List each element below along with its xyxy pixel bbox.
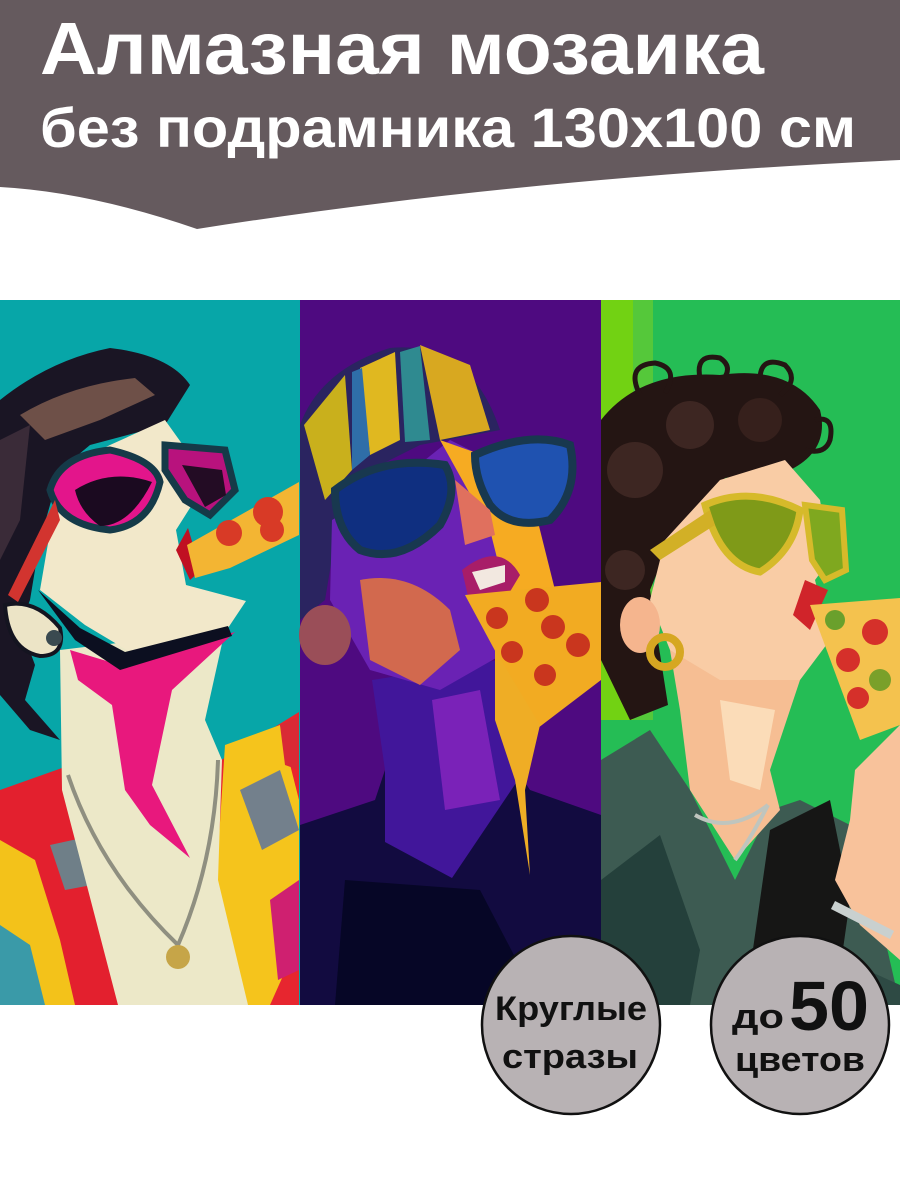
jacket [601,730,900,1005]
badge: round rhinestones: Круглые [495,990,647,1028]
badge: up to 50 colours: до [732,998,784,1036]
sunglasses [705,496,800,572]
ear [299,605,351,665]
panel: green portrait [601,300,900,1005]
necklace [68,760,218,945]
sunglasses [50,450,160,530]
pizza slice [465,582,601,728]
lips [176,528,206,580]
badge: up to 50 colours [711,936,889,1114]
shirt [0,768,120,1005]
necklace [695,805,768,860]
neck shadow [70,632,235,858]
badge: up to 50 colours: 50 [789,967,869,1045]
face [330,440,545,690]
torso [300,740,601,1005]
badge: round rhinestones: стразы [502,1038,638,1076]
bracelet [833,905,892,935]
curly hair [601,373,822,720]
neck [372,660,518,878]
face [650,460,830,680]
ear [5,604,61,656]
nose [455,480,495,545]
title: Алмазная мозаика [40,7,765,90]
sunglasses [335,463,451,554]
pizza slice [187,482,299,578]
neck [670,650,800,860]
lips [793,580,828,630]
panel: teal portrait [0,300,300,1005]
panel: purple portrait [299,300,601,1005]
chest and neck [60,630,248,1005]
pizza slice [810,598,900,740]
hand [835,725,900,960]
ear and earring [620,597,660,653]
header banner [0,0,900,229]
badge: round rhinestones [482,936,660,1114]
face [40,420,246,652]
subtitle: без подрамника 130х100 см [40,96,856,159]
badge: up to 50 colours: цветов [735,1041,865,1079]
hair [300,347,500,620]
mouth [462,556,520,605]
short hair [0,348,190,740]
